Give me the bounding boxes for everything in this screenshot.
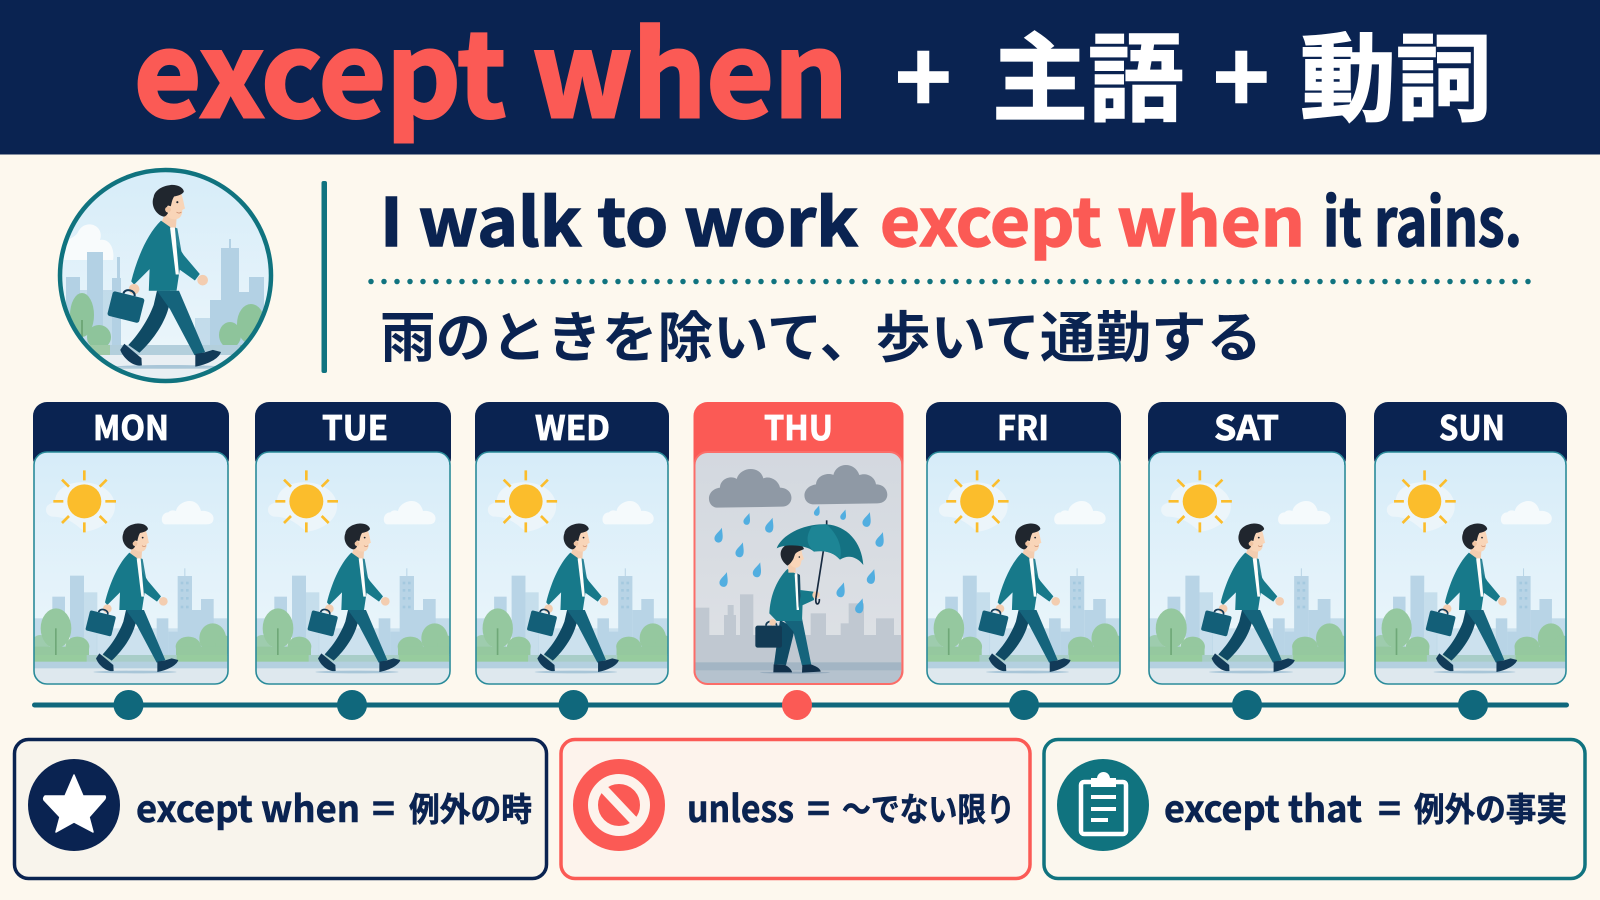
Japanese translation: 雨のときを除いて、歩いて通勤する bbox=[380, 293, 1262, 373]
title banner bbox=[0, 0, 1600, 154]
label: SAT: SAT bbox=[1214, 401, 1279, 450]
card: Saturday bbox=[1146, 401, 1349, 684]
label: TUE: TUE bbox=[322, 401, 388, 450]
scene: rainy Thursday bbox=[695, 452, 901, 684]
label: except when bbox=[136, 779, 532, 833]
label: WED: WED bbox=[535, 401, 610, 450]
scene: sunny Sunday bbox=[1372, 452, 1570, 683]
label: FRI: FRI bbox=[997, 401, 1049, 450]
icon: prohibited sign bbox=[573, 759, 665, 851]
panel: except that bbox=[1044, 740, 1585, 878]
label: MON: MON bbox=[93, 401, 169, 450]
scene: sunny Saturday bbox=[1146, 452, 1349, 683]
timeline bbox=[32, 690, 1569, 720]
label: unless: unless bbox=[687, 779, 794, 833]
panel: except when bbox=[14, 740, 546, 878]
scene: sunny Friday bbox=[924, 452, 1124, 683]
card: Sunday bbox=[1372, 401, 1570, 684]
icon: star bbox=[28, 759, 120, 851]
label: except that: except that bbox=[1164, 779, 1362, 833]
label: except that: = bbox=[1378, 779, 1401, 833]
example sentence bbox=[380, 170, 1522, 266]
scene: sunny Wednesday bbox=[473, 452, 672, 683]
card: Thursday (rain) bbox=[694, 401, 904, 684]
icon: storm clouds bbox=[709, 465, 887, 508]
title: plus subject plus verb: 主語 bbox=[992, 2, 1184, 141]
card: Tuesday bbox=[253, 401, 454, 684]
panel: unless bbox=[561, 740, 1030, 878]
label: except when: = bbox=[372, 779, 395, 833]
title: plus subject plus verb: + bbox=[895, 2, 952, 141]
scene: sunny Tuesday bbox=[253, 452, 454, 683]
dotted separator bbox=[371, 279, 1531, 284]
icon: rain drops bbox=[713, 505, 887, 614]
example sentence: I walk to work bbox=[380, 170, 858, 266]
title: plus subject plus verb: 動詞 bbox=[1300, 2, 1492, 141]
label: unless: = bbox=[807, 779, 830, 833]
card: Wednesday bbox=[473, 401, 672, 684]
title: plus subject plus verb: + bbox=[1213, 2, 1270, 141]
label: except that bbox=[1164, 779, 1567, 833]
label: except that: 例外の事実 bbox=[1414, 783, 1567, 831]
label: except when: except when bbox=[136, 779, 360, 833]
example sentence: it rains. bbox=[1323, 170, 1522, 266]
figure: man with umbrella bbox=[755, 520, 863, 674]
icon: clipboard bbox=[1057, 759, 1149, 851]
vertical divider bbox=[322, 181, 327, 373]
label: THU: THU bbox=[764, 401, 833, 450]
card: Monday bbox=[31, 401, 232, 684]
label: unless bbox=[687, 779, 1015, 833]
scene: sunny Monday bbox=[31, 452, 232, 683]
label: except when: 例外の時 bbox=[409, 783, 532, 831]
label: unless: 〜でない限り bbox=[842, 783, 1015, 831]
label: SUN: SUN bbox=[1439, 401, 1505, 450]
example sentence: except when bbox=[880, 170, 1305, 266]
card: Friday bbox=[924, 401, 1124, 684]
hero illustration: walking man in circle bbox=[58, 166, 274, 386]
